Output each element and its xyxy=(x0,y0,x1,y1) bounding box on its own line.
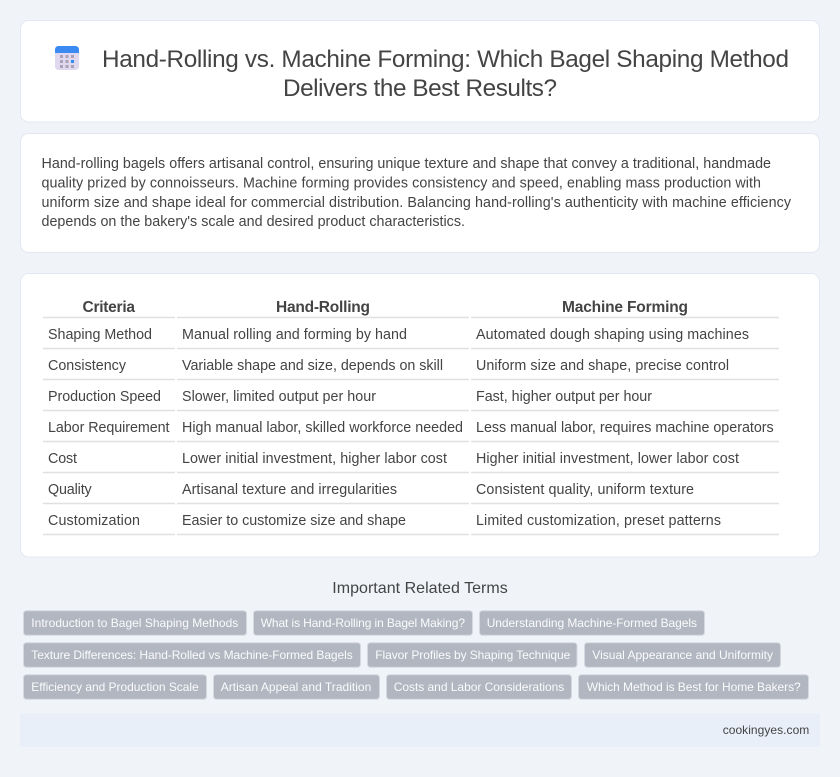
footer xyxy=(20,713,820,747)
panel: comparison table xyxy=(20,274,820,557)
table row: labor requirement: Less manual labor, requires machine operators xyxy=(476,420,774,436)
table row: consistency: Uniform size and shape, precise control xyxy=(476,358,729,374)
table row: shaping method xyxy=(48,327,749,343)
tag: What is Hand-Rolling in Bagel Making? xyxy=(261,616,465,630)
table row: cost: Lower initial investment, higher labor cost xyxy=(182,451,447,467)
table header xyxy=(82,299,688,316)
table row: cost xyxy=(48,451,739,467)
tag: Visual Appearance and Uniformity xyxy=(592,648,773,662)
tag xyxy=(578,675,808,699)
text block: summary: quality prized by connoisseurs. Machine forming provides consistency and speed, enabling mass production with xyxy=(42,176,761,192)
tag: Which Method is Best for Home Bakers? xyxy=(587,680,801,694)
tag: Flavor Profiles by Shaping Technique xyxy=(375,648,571,662)
text block: summary: uniform size and shape ideal for commercial distribution. Balancing hand-rolling's authenticity with machine efficiency xyxy=(42,195,792,211)
tag: Efficiency and Production Scale xyxy=(31,680,199,694)
table row: customization: Limited customization, preset patterns xyxy=(476,513,721,529)
panel: title card xyxy=(20,20,820,122)
text block: summary: depends on the bakery's scale and desired product characteristics. xyxy=(42,214,465,230)
table row: production speed: Slower, limited output per hour xyxy=(182,389,376,405)
table row: shaping method: Automated dough shaping using machines xyxy=(476,327,749,343)
tag: Introduction to Bagel Shaping Methods xyxy=(31,616,238,630)
tag: Texture Differences: Hand-Rolled vs Machine-Formed Bagels xyxy=(31,648,353,662)
tag xyxy=(386,675,572,699)
panel: related term tags xyxy=(24,611,808,699)
tag: Artisan Appeal and Tradition xyxy=(221,680,371,694)
table header: Machine Forming xyxy=(562,299,688,316)
tag xyxy=(584,643,780,667)
table header: Hand-Rolling xyxy=(276,299,370,316)
table row: labor requirement: High manual labor, skilled workforce needed xyxy=(182,420,463,436)
title: Hand-Rolling vs. Machine Forming: Which Bagel Shaping Method xyxy=(102,46,789,73)
tag xyxy=(24,675,206,699)
tag: Costs and Labor Considerations xyxy=(394,680,564,694)
text block: summary xyxy=(42,156,792,230)
table row: production speed: Production Speed xyxy=(48,389,161,405)
table row: quality: Quality xyxy=(48,482,93,498)
icon: calendar xyxy=(55,46,79,70)
tag xyxy=(24,643,360,667)
panel: summary paragraph xyxy=(20,134,820,252)
tag xyxy=(214,675,380,699)
table row: customization xyxy=(48,513,721,529)
footer source text: cookingyes.com xyxy=(723,723,809,737)
table row: cost: Higher initial investment, lower labor cost xyxy=(476,451,739,467)
table row: quality: Artisanal texture and irregularities xyxy=(182,482,397,498)
table row: shaping method: Shaping Method xyxy=(48,327,152,343)
table row: production speed xyxy=(48,389,652,405)
table row: shaping method: Manual rolling and forming by hand xyxy=(182,327,407,343)
title xyxy=(102,46,789,102)
table row: production speed: Fast, higher output per hour xyxy=(476,389,652,405)
table row: customization: Easier to customize size and shape xyxy=(182,513,406,529)
heading: related terms: Important Related Terms xyxy=(332,580,508,597)
tag xyxy=(24,611,246,635)
tag xyxy=(254,611,472,635)
table row: quality xyxy=(48,482,694,498)
tag xyxy=(480,611,704,635)
table row: labor requirement xyxy=(48,420,774,436)
table header: Criteria xyxy=(82,299,135,316)
table row: quality: Consistent quality, uniform texture xyxy=(476,482,694,498)
table row: cost: Cost xyxy=(48,451,77,467)
table row: customization: Customization xyxy=(48,513,140,529)
text block: summary: Hand-rolling bagels offers artisanal control, ensuring unique texture and shape that convey a traditional, handmade xyxy=(42,156,771,172)
tag xyxy=(368,643,577,667)
table row: labor requirement: Labor Requirement xyxy=(48,420,170,436)
title: Delivers the Best Results? xyxy=(283,75,557,102)
table row: consistency: Variable shape and size, depends on skill xyxy=(182,358,443,374)
table row: consistency: Consistency xyxy=(48,358,127,374)
table row: consistency xyxy=(48,358,729,374)
tag: Understanding Machine-Formed Bagels xyxy=(487,616,697,630)
